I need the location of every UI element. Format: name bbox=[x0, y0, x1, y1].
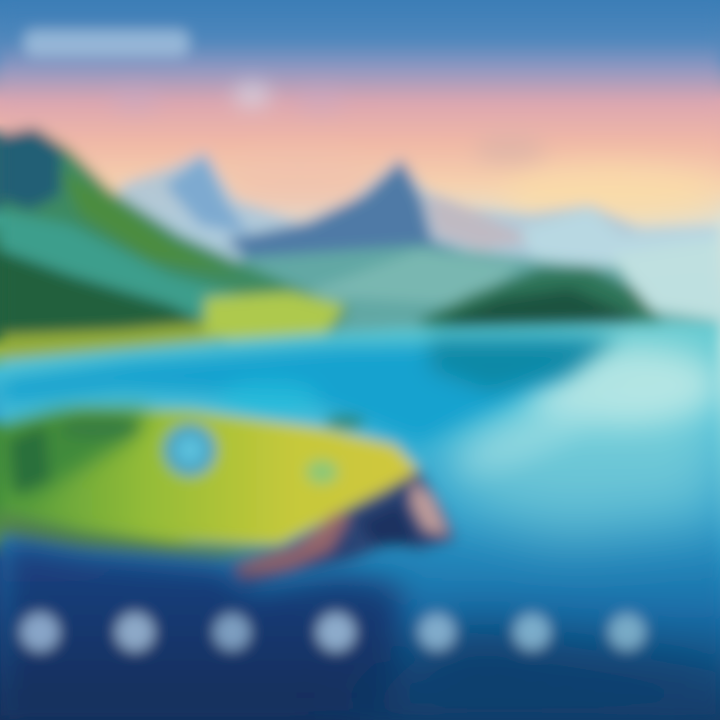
marker 7 bbox=[609, 614, 645, 650]
row of seven circular markers bbox=[21, 613, 645, 651]
left mountain bbox=[0, 128, 350, 370]
mid valley haze bbox=[240, 240, 720, 340]
marker 2 bbox=[116, 613, 154, 651]
right hill island bbox=[415, 268, 665, 340]
marker 5 bbox=[419, 614, 455, 650]
sky highlights bbox=[111, 83, 546, 166]
far mountains bbox=[120, 152, 720, 320]
marker 3 bbox=[214, 614, 250, 650]
marker 4 bbox=[317, 613, 355, 651]
marker 1 bbox=[21, 613, 59, 651]
lake bbox=[0, 322, 720, 720]
foreground land bbox=[0, 408, 420, 558]
marker 6 bbox=[514, 614, 550, 650]
shore cliff bbox=[230, 470, 455, 585]
bottom band bbox=[0, 535, 720, 720]
sky bbox=[0, 0, 720, 340]
title placeholder glow bbox=[24, 30, 189, 56]
